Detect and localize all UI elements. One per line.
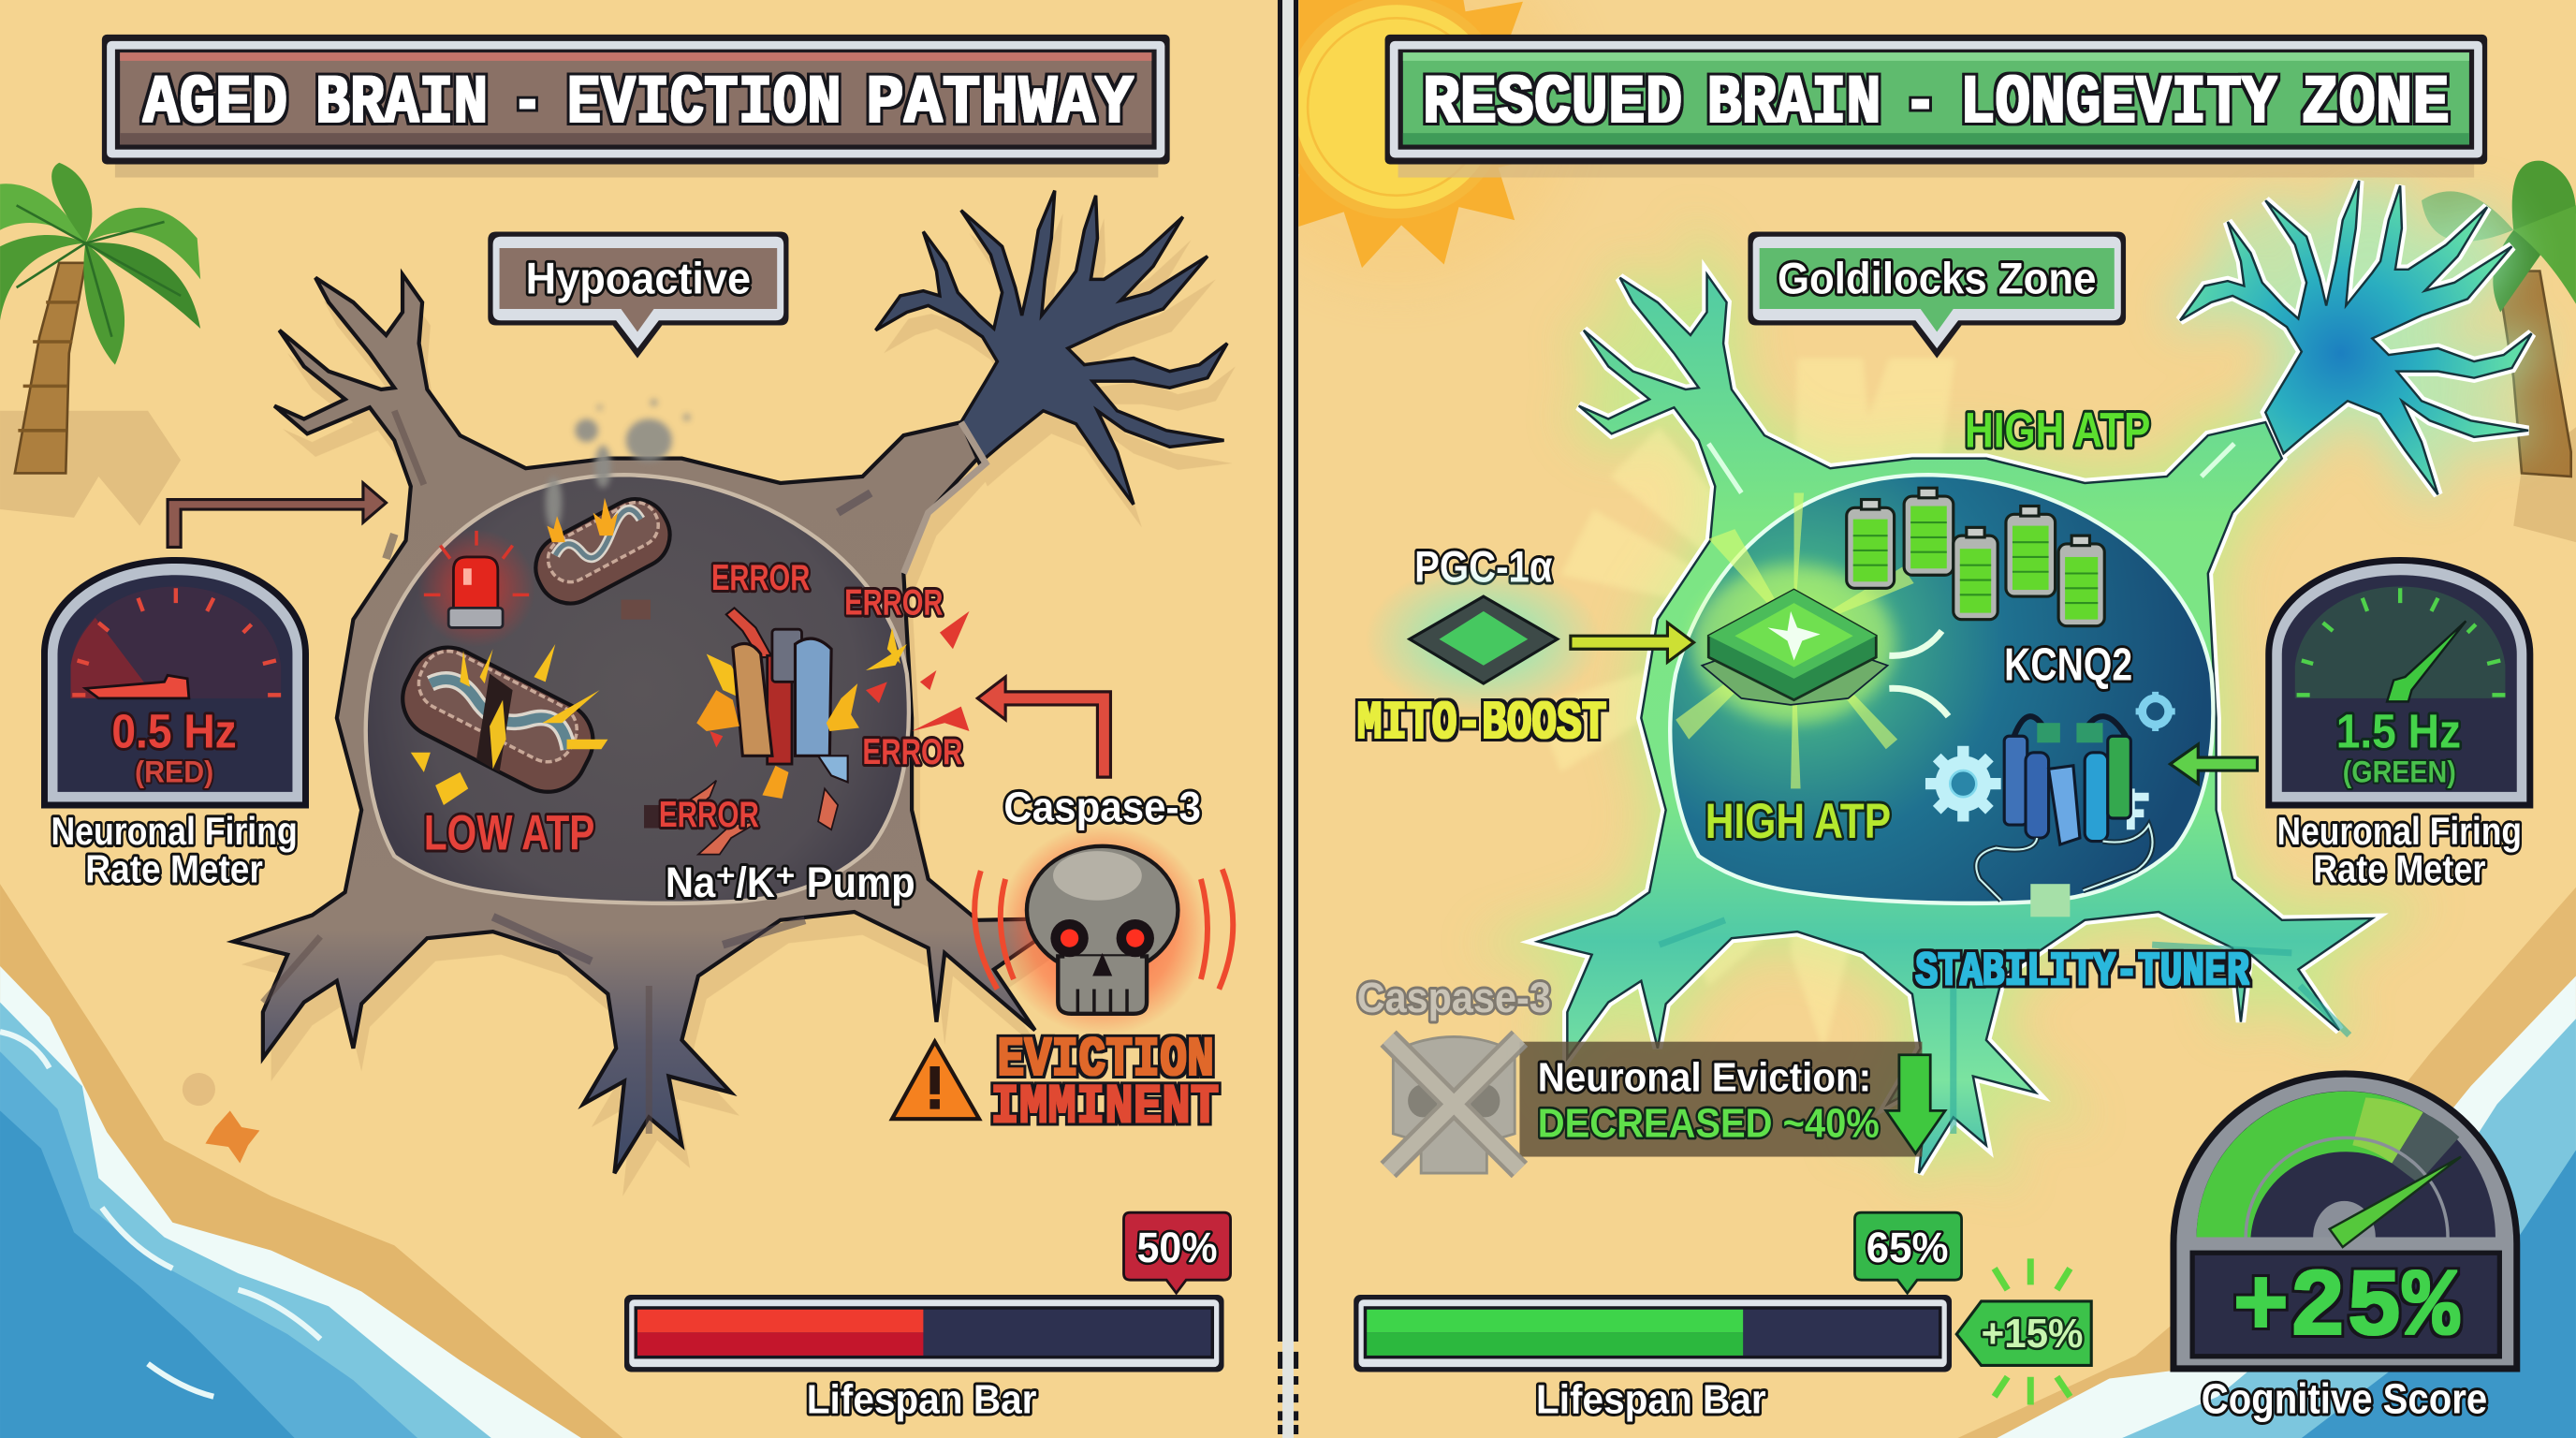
tag: 50 percent [1123,1212,1231,1293]
arrow: meter to channel [2170,744,2257,784]
gauge: firing rate red: 0.5 Hz [111,705,237,758]
damaged mitochondrion top [524,488,681,615]
title: rescued brain: BRAIN [1707,66,1881,143]
bar: lifespan 65 percent [1354,1295,1952,1372]
cell interior rescued [1670,475,2213,903]
sun [1298,0,1552,278]
label: meter right [2277,809,2522,890]
title: rescued brain: LONGEVITY [1960,66,2277,143]
title: aged brain: PATHWAY [866,66,1134,143]
label: low ATP: LOW ATP [424,805,594,860]
sparks and debris [411,600,970,855]
label: meter right: Neuronal Firing [2277,809,2522,853]
beach water left [0,884,624,1438]
panel: aged brain [0,35,1236,1438]
label: PGC-1 alpha: PGC-1α [1414,542,1553,592]
title: rescued brain: ZONE [2302,66,2450,143]
damaged mitochondrion bottom [389,634,607,805]
icon: gears [1925,692,2175,829]
title: rescued brain: - [1904,66,1937,143]
panel: neuronal eviction decreased: Neuronal Eviction: [1538,1054,1871,1100]
label: lifespan bar right: Lifespan Bar [1536,1376,1766,1422]
gauge: firing rate red [41,557,309,808]
label: meter left: Neuronal Firing [51,809,298,853]
arrows inside cell [1889,631,1949,716]
label: high ATP lower: HIGH ATP [1705,794,1891,849]
smoke [546,399,690,529]
gauge: firing rate green: 1.5 Hz [2336,705,2461,758]
icon: large chip [1702,590,1888,705]
title: rescued brain: RESCUED [1423,66,1682,143]
beach decoration: starfish and pebble [183,1073,259,1164]
callout: hypoactive [488,231,788,359]
label: KCNQ2: KCNQ2 [2004,640,2132,691]
gauge: firing rate red: (RED) [135,755,213,788]
bar: lifespan 50 percent [624,1295,1224,1372]
label: eviction imminent: EVICTION [997,1028,1214,1092]
label: meter left: Rate Meter [85,846,263,890]
gauge: firing rate green: (GREEN) [2343,755,2456,788]
gauge: cognitive score [2170,1070,2520,1372]
glow around neuron [1538,181,2532,1173]
palm tree right [2422,161,2576,542]
label: error: ERROR [711,558,810,598]
label: meter right: Rate Meter [2313,846,2485,890]
alarm siren [417,529,535,647]
tag: 65 percent [1854,1212,1962,1293]
beach water right [1955,888,2576,1438]
icon: warning triangle [892,1042,979,1119]
title: rescued brain [1385,35,2487,178]
tag: plus 15 percent with rays: +15% [1982,1311,2083,1357]
gauge: cognitive score: +25% [2232,1255,2460,1363]
callout: hypoactive: Hypoactive [526,254,751,303]
callout: goldilocks zone [1748,231,2126,359]
label: eviction imminent [990,1028,1219,1139]
panel: rescued brain [1216,0,2576,1438]
label: stability tuner: STABILITY-TUNER [1915,946,2249,999]
icon: crossed skull [1388,1036,1519,1173]
label: caspase-3 greyed: Caspase-3 [1357,974,1551,1021]
center divider [1278,0,1298,1438]
arrow: meter to neuron [168,483,386,547]
label: meter left [51,809,298,890]
title: aged brain: - [513,66,542,143]
label: lifespan bar left: Lifespan Bar [807,1376,1036,1422]
label: cognitive score: Cognitive Score [2202,1374,2487,1422]
label: eviction imminent: IMMINENT [990,1076,1219,1139]
neuron: rescued body and dendrites [1538,181,2532,1173]
title: aged brain: BRAIN [315,66,488,143]
icon: KCNQ2 channel [1976,716,2153,917]
panel: neuronal eviction decreased [1519,1042,1945,1157]
gauge: firing rate green [2265,557,2533,808]
label: sodium potassium pump: Na⁺/K⁺ Pump [666,858,915,906]
label: error fourth: ERROR [659,795,759,835]
title: aged brain: EVICTION [567,66,842,143]
label: error third: ERROR [862,732,963,772]
tag: 50 percent: 50% [1137,1224,1218,1271]
label: high ATP top: HIGH ATP [1965,403,2150,458]
neuron: aged body and dendrites [233,191,1227,1173]
label: error second: ERROR [844,582,944,623]
cell interior [366,475,909,903]
arrow: chip to cell [1571,623,1693,662]
tag: 65 percent: 65% [1866,1224,1949,1271]
label: mito boost: MITO-BOOST [1357,694,1606,755]
batteries [1847,488,2104,626]
callout: goldilocks zone: Goldilocks Zone [1778,254,2096,303]
icon: small chip [1365,564,1602,714]
light rays [1536,359,1955,1051]
icon: skull with red glow [974,825,1233,1035]
palm tree left [0,163,200,526]
shadow of neuron [242,213,1236,1196]
title: aged brain: AGED [143,66,287,143]
title: aged brain [102,35,1170,178]
label: caspase-3: Caspase-3 [1003,784,1201,831]
panel: neuronal eviction decreased: DECREASED ~40% [1538,1100,1880,1146]
tag: plus 15 percent with rays [1956,1258,2091,1405]
arrow: caspase to neuron [977,677,1110,777]
sodium potassium pump [696,608,859,799]
